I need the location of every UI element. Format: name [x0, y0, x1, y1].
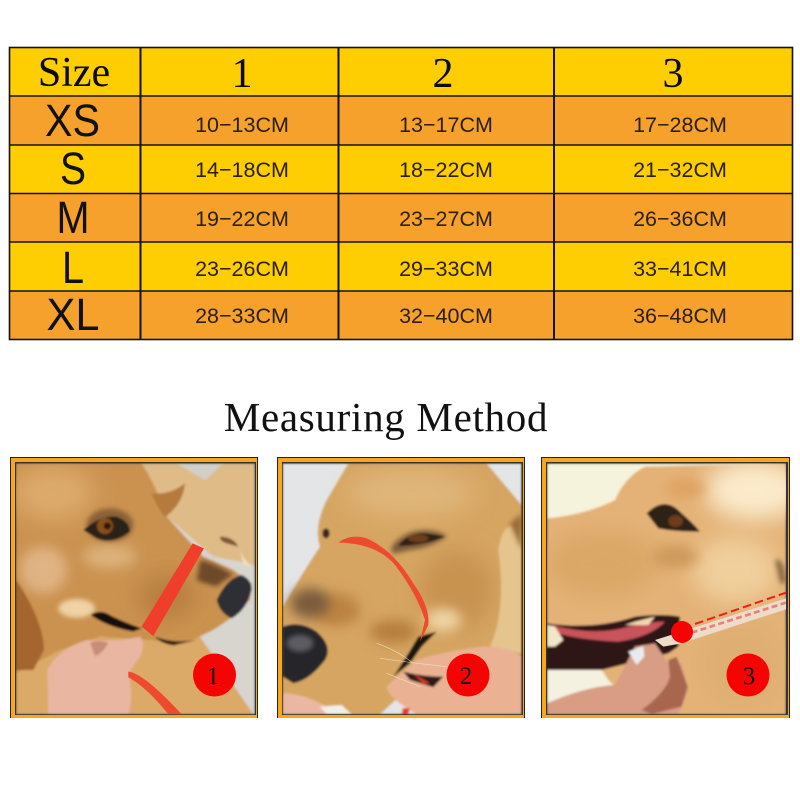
photo 1: dog with ribbon around muzzle — [13, 463, 255, 714]
row XL — [46, 289, 727, 340]
row S: 14−18CM — [195, 158, 289, 182]
measuring tape — [655, 598, 786, 647]
panel 3 frame — [541, 457, 790, 718]
red start dot — [671, 621, 693, 643]
panel 1 frame — [10, 457, 258, 718]
photo 2: dog with ribbon over nose — [283, 463, 522, 714]
ribbon over nose — [338, 537, 428, 642]
row S: S — [60, 143, 86, 194]
header row: 2 — [432, 51, 454, 97]
row XS — [45, 95, 727, 146]
row M: M — [56, 192, 90, 243]
row XL: XL — [46, 289, 100, 340]
row XS: 17−28CM — [633, 113, 727, 137]
row XL: 32−40CM — [399, 304, 493, 328]
header row: 3 — [662, 51, 684, 97]
size table — [9, 47, 793, 340]
row XL: 28−33CM — [195, 304, 289, 328]
row S — [60, 143, 727, 194]
row XS: 10−13CM — [195, 113, 289, 137]
row S: 18−22CM — [399, 158, 493, 182]
row L: L — [62, 242, 84, 293]
title: Measuring Method — [224, 394, 548, 440]
row XS: XS — [45, 95, 100, 146]
badge 1 — [193, 654, 236, 696]
row L: 23−26CM — [195, 257, 289, 281]
ribbon on muzzle — [142, 543, 204, 636]
whiskers — [377, 643, 447, 687]
table grid lines — [9, 47, 793, 340]
badge 3 — [726, 654, 770, 696]
row M: 26−36CM — [633, 207, 727, 231]
badge 3: 3 — [743, 663, 755, 690]
ribbon below hand — [128, 672, 182, 714]
row L — [62, 242, 727, 293]
header row: Size — [38, 50, 110, 96]
row XS: 13−17CM — [399, 113, 493, 137]
photo 3: dog with tape around neck — [545, 460, 800, 714]
row S: 21−32CM — [633, 158, 727, 182]
red dashed line — [695, 593, 786, 624]
header row: 1 — [232, 51, 252, 97]
row M — [56, 192, 727, 243]
badge 2 — [446, 654, 490, 696]
row M: 19−22CM — [195, 207, 289, 231]
tape markings — [692, 603, 786, 633]
panel 2 frame — [277, 457, 525, 718]
panel 1: muzzle circumference — [10, 457, 258, 718]
panel 3: neck measurement — [541, 457, 800, 718]
panel 2: nose to throat — [277, 457, 525, 718]
row L: 29−33CM — [399, 257, 493, 281]
row XL: 36−48CM — [633, 304, 727, 328]
row L: 33−41CM — [633, 257, 727, 281]
row M: 23−27CM — [399, 207, 493, 231]
header row — [38, 50, 684, 97]
table row backgrounds — [10, 48, 792, 339]
badge 1: 1 — [207, 663, 219, 690]
badge 2: 2 — [460, 663, 472, 690]
